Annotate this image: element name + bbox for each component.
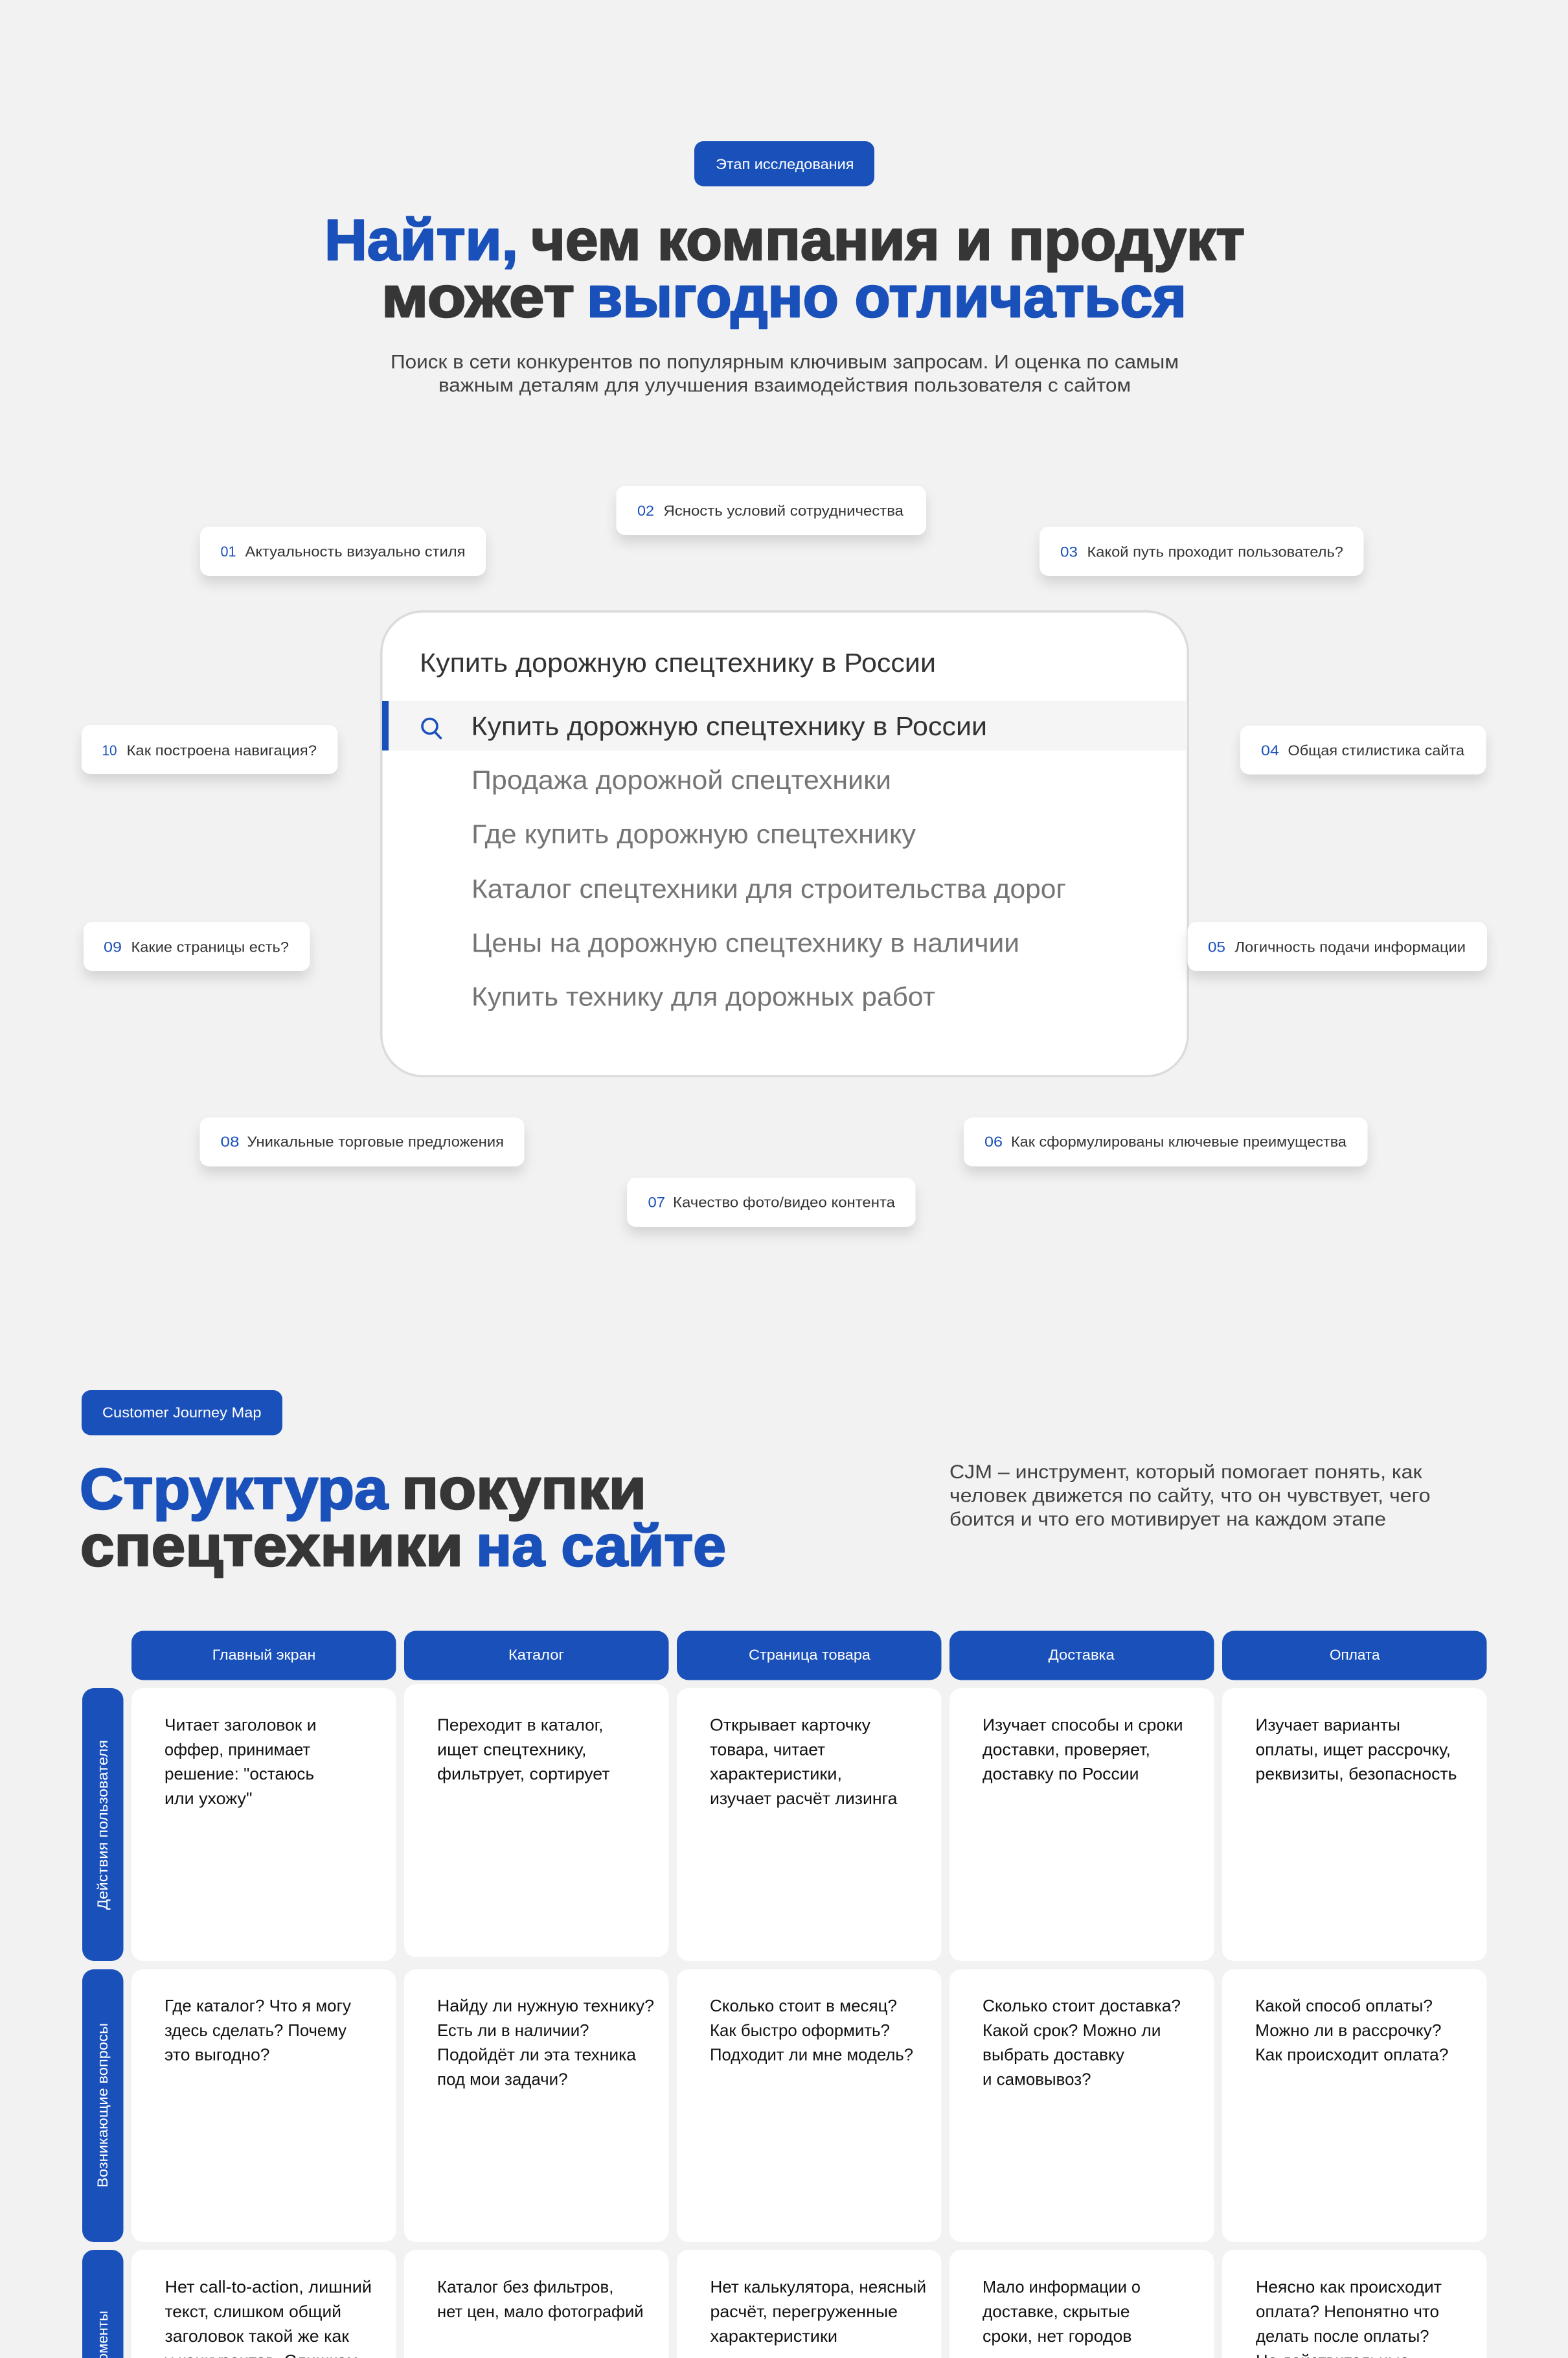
cell: delivery problems: Мало информации о <box>983 2277 1141 2296</box>
cell: catalog questions: под мои задачи? <box>437 2069 567 2089</box>
chip 02 <box>617 486 926 535</box>
cell: catalog questions <box>404 1969 668 2242</box>
chip 10: Как построена навигация? <box>127 742 317 759</box>
header: catalog <box>404 1631 668 1680</box>
cell: product page problems: расчёт, перегруженные <box>710 2302 898 2321</box>
title: find what differentiates: может <box>381 264 574 329</box>
cell: main screen problems: текст, слишком общий <box>165 2302 341 2321</box>
cell: catalog problems <box>404 2250 668 2358</box>
row: problem moments <box>82 2250 1487 2358</box>
chip 07: Качество фото/видео контента <box>673 1195 896 1210</box>
cell: delivery questions: выбрать доставку <box>983 2045 1124 2065</box>
cell: product page problems <box>677 2250 942 2358</box>
cell: delivery actions: доставки, проверяет, <box>983 1740 1150 1759</box>
row label: user actions: Действия пользователя <box>95 1740 111 1910</box>
cell: main screen actions: оффер, принимает <box>165 1740 310 1759</box>
title: find what differentiates <box>324 207 1245 329</box>
chip 04 <box>1240 726 1486 775</box>
chip 09 <box>84 922 310 971</box>
cell: main screen actions: или ухожу" <box>165 1789 253 1808</box>
cell: payment questions: Можно ли в рассрочку? <box>1255 2020 1442 2040</box>
title: purchase structure: Структура <box>80 1456 389 1521</box>
chip 07: 07 <box>648 1195 665 1210</box>
cell: product page questions <box>677 1969 942 2242</box>
badge: customer journey map: Customer Journey Map <box>102 1404 262 1421</box>
subtitle text: Поиск в сети конкурентов по популярным ключивым запросам. И оценка по самым <box>391 351 1179 373</box>
cell: product page problems: характеристики <box>710 2326 837 2346</box>
cell: payment problems: делать после оплаты? <box>1256 2326 1429 2346</box>
description: what CJM is <box>949 1461 1430 1530</box>
cell: main screen actions <box>131 1688 396 1961</box>
cell: payment questions: Как происходит оплата? <box>1255 2045 1448 2065</box>
cell: payment questions: Какой способ оплаты? <box>1255 1996 1433 2015</box>
title: find what differentiates: чем компания и продукт <box>531 207 1245 272</box>
description: what CJM is: CJM – инструмент, который помогает понять, как <box>949 1461 1422 1483</box>
title: purchase structure: на сайте <box>476 1513 726 1578</box>
chip 04: 04 <box>1261 742 1279 759</box>
cell: payment questions <box>1222 1969 1487 2242</box>
cell: product page questions: Подходит ли мне модель? <box>710 2045 913 2065</box>
header: main screen: Главный экран <box>212 1647 315 1663</box>
badge: research stage <box>694 141 874 187</box>
column headers <box>131 1631 1487 1680</box>
cell: catalog actions: ищет спецтехнику, <box>437 1740 587 1759</box>
title: purchase structure <box>80 1456 726 1578</box>
chip 01 <box>200 527 486 576</box>
header: delivery: Доставка <box>1049 1647 1115 1663</box>
suggestion list <box>472 765 1066 1012</box>
title: find what differentiates: Найти, <box>324 207 518 272</box>
title: purchase structure: покупки <box>402 1456 646 1521</box>
cell: product page actions: изучает расчёт лизинга <box>710 1789 898 1808</box>
cell: delivery questions: Сколько стоит доставка? <box>983 1996 1181 2015</box>
highlighted suggestion row: Купить дорожную спецтехнику в России <box>472 711 987 741</box>
header: catalog: Каталог <box>508 1647 564 1663</box>
cell: main screen problems <box>131 2250 396 2358</box>
cell: main screen questions: здесь сделать? Почему <box>165 2020 347 2040</box>
panel: search box <box>381 612 1188 1076</box>
cell: product page actions: товара, читает <box>710 1740 825 1759</box>
cell: catalog questions: Найду ли нужную технику? <box>437 1996 654 2015</box>
chip 09: Какие страницы есть? <box>131 939 289 955</box>
cell: delivery questions: и самовывоз? <box>983 2069 1091 2089</box>
chip 02: Ясность условий сотрудничества <box>663 503 904 519</box>
cell: payment actions: реквизиты, безопасность <box>1255 1764 1457 1783</box>
cell: product page actions <box>677 1688 942 1961</box>
cell: main screen questions: это выгодно? <box>165 2045 269 2065</box>
cell: main screen problems: Нет call-to-action, лишний <box>165 2277 372 2296</box>
cell: delivery problems: доставке, скрытые <box>983 2302 1130 2321</box>
chip 10 <box>82 725 338 774</box>
chip 06: Как сформулированы ключевые преимущества <box>1011 1134 1347 1150</box>
cell: catalog problems: Каталог без фильтров, <box>437 2277 614 2296</box>
cell: product page actions: характеристики, <box>710 1764 842 1783</box>
cell: product page problems: Нет калькулятора, неясный <box>710 2277 926 2296</box>
cell: delivery problems <box>949 2250 1214 2358</box>
header: product page: Страница товара <box>749 1647 871 1663</box>
cell: payment problems: оплата? Непонятно что <box>1256 2302 1439 2321</box>
header: product page <box>677 1631 942 1680</box>
cell: product page questions: Сколько стоит в месяц? <box>710 1996 897 2015</box>
cell: delivery actions <box>949 1688 1214 1961</box>
cell: delivery questions <box>949 1969 1214 2242</box>
cell: payment actions: Изучает варианты <box>1255 1715 1400 1735</box>
header: delivery <box>949 1631 1214 1680</box>
header: payment <box>1222 1631 1487 1680</box>
header: main screen <box>131 1631 396 1680</box>
title: find what differentiates: выгодно отличаться <box>587 264 1187 329</box>
cell: main screen actions: решение: "остаюсь <box>165 1764 314 1783</box>
chip 06: 06 <box>984 1134 1003 1150</box>
row: arising questions <box>82 1969 1487 2242</box>
cell: main screen actions: Читает заголовок и <box>165 1715 316 1735</box>
cell: payment actions: оплаты, ищет рассрочку, <box>1255 1740 1451 1759</box>
subtitle text: важным деталям для улучшения взаимодействия пользователя с сайтом <box>438 374 1131 396</box>
suggestion list: Продажа дорожной спецтехники <box>472 765 891 795</box>
subtitle text <box>391 351 1179 396</box>
cell: payment actions <box>1222 1688 1487 1961</box>
suggestion list: Купить технику для дорожных работ <box>472 982 935 1012</box>
icon: magnifier <box>422 719 440 738</box>
cell: catalog problems: нет цен, мало фотографий <box>437 2302 644 2321</box>
cell: product page questions: Как быстро оформить? <box>710 2020 890 2040</box>
chip 08: 08 <box>220 1134 240 1150</box>
chip 05 <box>1188 922 1487 971</box>
chip 05: 05 <box>1208 939 1225 955</box>
cell: catalog actions: Переходит в каталог, <box>437 1715 604 1735</box>
suggestion list: Цены на дорожную спецтехнику в наличии <box>472 928 1019 958</box>
cell: catalog actions: фильтрует, сортирует <box>437 1764 610 1783</box>
chip 05: Логичность подачи информации <box>1234 939 1466 955</box>
cell: delivery problems: сроки, нет городов <box>983 2326 1132 2346</box>
cell: payment problems: Неясно как происходит <box>1256 2277 1442 2296</box>
cell: catalog actions <box>404 1684 668 1957</box>
row label: user actions <box>82 1688 123 1961</box>
cell: delivery actions: доставку по России <box>983 1764 1139 1783</box>
chip 01: 01 <box>220 544 236 560</box>
cell: delivery actions: Изучает способы и сроки <box>983 1715 1183 1735</box>
chip 02: 02 <box>637 503 654 519</box>
cell: delivery questions: Какой срок? Можно ли <box>983 2020 1161 2040</box>
chip 06 <box>964 1117 1368 1166</box>
cell: product page actions: Открывает карточку <box>710 1715 870 1735</box>
row label: arising questions <box>82 1969 123 2242</box>
description: what CJM is: человек движется по сайту, что он чувствует, чего <box>949 1485 1430 1507</box>
cell: main screen problems: заголовок такой же как <box>165 2326 350 2346</box>
highlighted suggestion row <box>382 701 1187 750</box>
title: purchase structure: спецтехники <box>80 1513 463 1578</box>
description: what CJM is: боится и что его мотивирует на каждом этапе <box>949 1509 1386 1530</box>
badge: customer journey map <box>82 1390 282 1436</box>
suggestion list: Где купить дорожную спецтехнику <box>472 819 916 849</box>
chip 08 <box>199 1117 525 1166</box>
header: payment: Оплата <box>1330 1647 1380 1663</box>
chip 03: Какой путь проходит пользователь? <box>1087 544 1343 560</box>
suggestion list: Каталог спецтехники для строительства дорог <box>472 874 1066 904</box>
row: user actions <box>82 1684 1487 1961</box>
chip 10: 10 <box>102 742 117 759</box>
cell: main screen questions <box>131 1969 396 2242</box>
chip 07 <box>627 1178 916 1227</box>
chip 04: Общая стилистика сайта <box>1288 742 1465 759</box>
chip 08: Уникальные торговые предложения <box>247 1134 504 1150</box>
chip 01: Актуальность визуально стиля <box>245 544 465 560</box>
cell: payment problems <box>1222 2250 1487 2358</box>
cell: catalog questions: Подойдёт ли эта техника <box>437 2045 637 2065</box>
row label: problem moments <box>82 2250 123 2358</box>
cell: main screen questions: Где каталог? Что я могу <box>165 1996 351 2015</box>
chip 09: 09 <box>104 939 122 955</box>
badge: research stage: Этап исследования <box>716 156 854 172</box>
row label: arising questions: Возникающие вопросы <box>95 2023 111 2188</box>
search query text: Купить дорожную спецтехнику в России <box>420 648 936 678</box>
chip 03 <box>1040 527 1364 576</box>
chip 03: 03 <box>1060 544 1078 560</box>
cell: catalog questions: Есть ли в наличии? <box>437 2020 589 2040</box>
